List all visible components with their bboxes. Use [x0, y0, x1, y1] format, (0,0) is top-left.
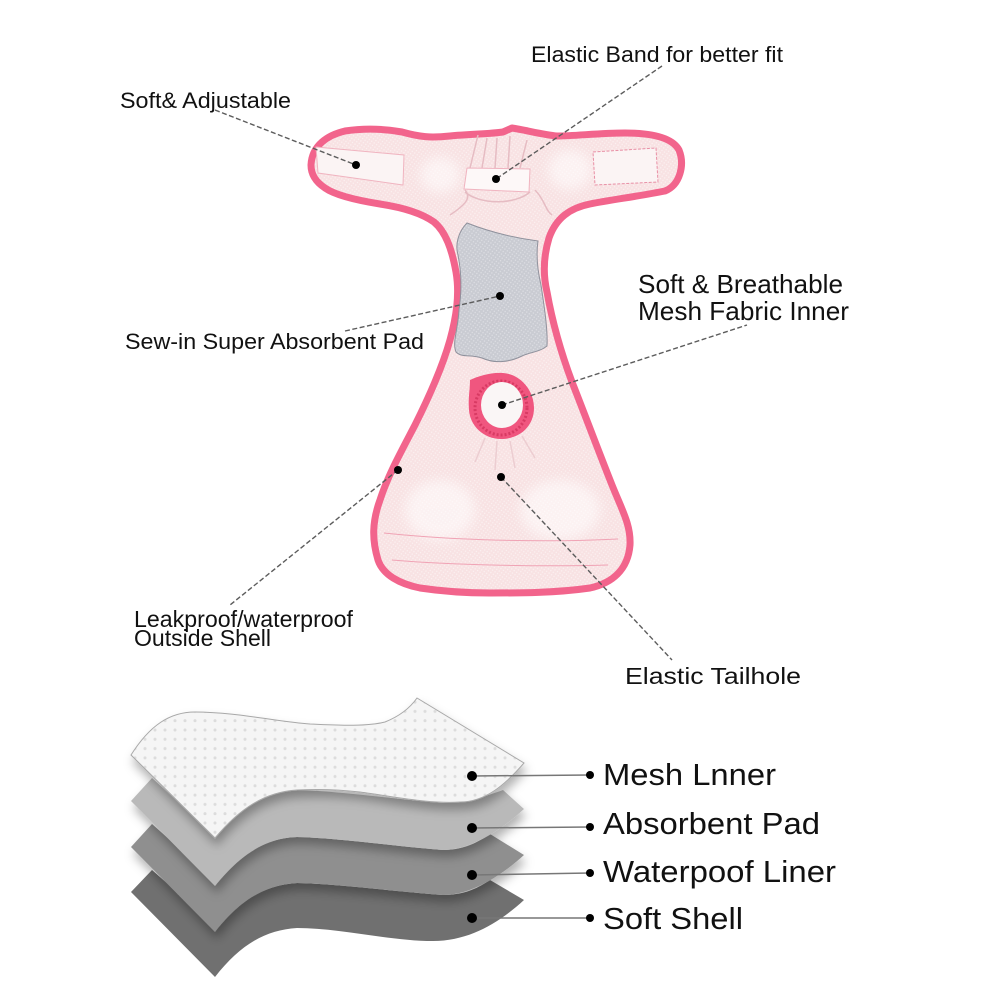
layer: soft shell [131, 870, 524, 977]
leader: elastic band [492, 66, 662, 183]
label: breathable mesh: Soft & Breathable [638, 269, 843, 299]
elastic band patch [464, 168, 530, 192]
leader: soft adjustable [215, 110, 360, 169]
label: breathable mesh: Mesh Fabric Inner [638, 296, 849, 326]
label: tailhole: Elastic Tailhole [625, 663, 801, 689]
fabric highlights [405, 150, 600, 540]
connector: shell [467, 913, 594, 923]
label: elastic band: Elastic Band for better fit [531, 42, 783, 67]
left velcro strip [316, 147, 404, 185]
label: outside shell: Outside Shell [134, 625, 271, 651]
diaper product [311, 128, 681, 593]
label: waterpoof liner: Waterpoof Liner [603, 854, 836, 889]
absorbent pad [455, 223, 547, 362]
hem stitching [384, 533, 618, 566]
leader: tailhole [497, 473, 672, 660]
label: soft shell: Soft Shell [603, 901, 743, 936]
layer: mesh [131, 698, 524, 838]
leader: outside shell [230, 466, 402, 605]
layer: absorbent pad [131, 778, 524, 886]
connector: mesh [467, 771, 594, 781]
label: absorbent pad layer: Absorbent Pad [603, 806, 820, 841]
label: absorbent pad: Sew-in Super Absorbent Pad [125, 329, 424, 354]
leader: absorbent pad [345, 292, 504, 331]
label: outside shell: Leakproof/waterproof [134, 606, 354, 632]
right velcro strip [593, 148, 658, 185]
connector: absorbent [467, 823, 594, 833]
connector: liner [467, 869, 594, 880]
tail hole [469, 373, 534, 439]
layer stack illustration [131, 698, 524, 977]
gathers below tail hole [475, 436, 535, 470]
layer: waterproof liner [131, 824, 524, 932]
label: soft adjustable: Soft& Adjustable [120, 88, 291, 113]
label: outside shell [134, 606, 354, 651]
waist gathers [450, 135, 552, 215]
label: breathable mesh [638, 269, 849, 326]
leader: mesh inner [498, 325, 747, 409]
diaper body [311, 128, 681, 593]
label: mesh lnner: Mesh Lnner [603, 757, 776, 792]
